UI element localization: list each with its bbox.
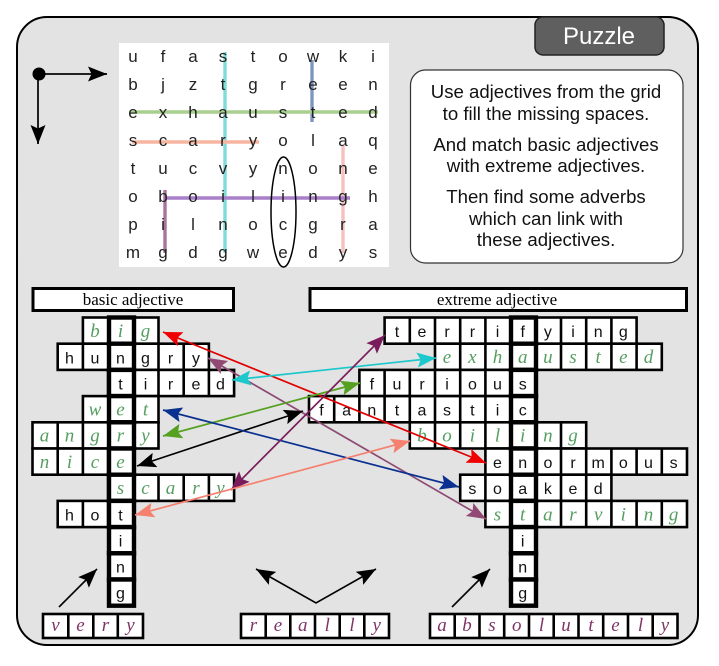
vertical word: interesting: i [118, 321, 123, 342]
vertical word: fascinating: i [521, 534, 524, 550]
vertical word: interesting: t [118, 376, 123, 394]
arrows: really [256, 569, 376, 603]
instructions text box [410, 70, 683, 263]
vertical word: fascinating: n [518, 560, 527, 576]
word: exhausted: exhusted [443, 347, 654, 368]
word: hot: ho [65, 508, 100, 524]
arrow: very [59, 569, 97, 607]
vertical word: fascinating: a [518, 481, 527, 498]
word search grid: mgdgwedys [126, 243, 377, 262]
vertical word: interesting: n [116, 350, 125, 368]
word: scary [108, 475, 234, 501]
icon: direction arrows [32, 68, 107, 144]
instructions text box: Use adjectives from the grid [431, 81, 661, 102]
arrow: nice to fantastic [137, 411, 303, 466]
word: scary: cary [141, 478, 225, 499]
vertical word: interesting: e [116, 400, 125, 420]
arrow: big to enormous [163, 332, 486, 463]
word: angry: angy [40, 426, 150, 446]
adverb: really: really [250, 615, 381, 636]
instructions text box: to fill the missing spaces. [443, 103, 649, 124]
arrow: scary to terrifying [231, 335, 385, 490]
word search grid: ufastowki [128, 47, 375, 66]
word search grid: pilnocgra [128, 215, 378, 234]
vertical word: fascinating [511, 318, 536, 606]
matching arrows [135, 332, 486, 519]
vertical word: fascinating: t [520, 504, 526, 526]
word: boiling: boilng [417, 426, 578, 446]
word: wet: wt [89, 400, 149, 420]
word: big [83, 318, 158, 344]
vertical word: interesting: g [116, 586, 125, 602]
heading: extreme adjective [310, 288, 686, 310]
vertical word: fascinating: g [518, 586, 527, 602]
vertical word: interesting: i [119, 534, 122, 550]
adverb: absolutely: absolutely [437, 615, 670, 636]
vertical word: interesting: t [118, 508, 123, 524]
instructions text box: And match basic adjectives [433, 134, 659, 155]
word: fantastic [309, 396, 511, 422]
heading: basic adjective [33, 288, 234, 310]
word: hungry [58, 344, 209, 370]
instructions text box: these adjectives. [477, 229, 615, 250]
word: angry [32, 422, 158, 448]
word search grid: oboilingh [128, 187, 378, 206]
vertical word: interesting: r [117, 426, 125, 446]
word: furious [359, 370, 511, 396]
vertical word: fascinating: s [519, 376, 527, 394]
vertical word: fascinating: n [518, 455, 527, 472]
word: hungry: hugry [65, 350, 200, 368]
arrow: hot to boiling [135, 441, 410, 515]
word: terrifying: terriying [395, 324, 628, 341]
word: nice: nic [40, 452, 100, 473]
word: hot [58, 501, 108, 527]
basic adjective crossword [32, 318, 234, 606]
heading tab: Puzzle [535, 17, 664, 55]
arrow: tired to exhausted [232, 358, 436, 380]
word: nice [32, 448, 108, 475]
adverb: very: very [51, 615, 135, 636]
vertical word: fascinating: f [520, 324, 525, 341]
heading: extreme adjective: extreme adjective [437, 290, 557, 309]
instructions text box: with extreme adjectives. [446, 155, 645, 176]
instructions text box: which can link with [468, 208, 623, 229]
word: enormous [485, 448, 687, 475]
word: tired [108, 370, 234, 396]
arrow: hungry to starving [208, 358, 486, 519]
extreme adjective crossword [309, 318, 687, 606]
word: fantastic: fantasti [319, 402, 499, 420]
word: soaked: soked [468, 481, 603, 498]
vertical word: interesting: n [116, 560, 125, 576]
arrow: wet to soaked [163, 410, 459, 487]
word: tired: ired [144, 376, 225, 394]
vertical word: fascinating: a [518, 347, 527, 368]
word search grid [119, 43, 389, 267]
vertical word: fascinating: i [520, 426, 525, 446]
heading tab: Puzzle: Puzzle [563, 23, 635, 50]
word search grid: tucvynone [131, 159, 378, 178]
word: starving: sarving [494, 504, 678, 526]
word search grid: exhausted [128, 103, 378, 122]
vertical word: fascinating: c [519, 402, 527, 420]
word: wet [83, 396, 158, 422]
heading: basic adjective: basic adjective [83, 290, 183, 309]
word: soaked [460, 475, 611, 501]
word: enormous: eormous [493, 455, 678, 472]
word: furious: furiou [370, 376, 502, 394]
vertical word: interesting: e [116, 452, 125, 473]
word search grid: scaryolaq [129, 131, 378, 150]
vertical word: interesting [109, 318, 134, 606]
word: terrifying [385, 318, 637, 344]
word search grid: bjztgreen [128, 75, 378, 94]
instructions text box: Then find some adverbs [446, 186, 646, 207]
arrow: angry to furious [163, 383, 360, 436]
arrow: absolutely [452, 569, 490, 607]
vertical word: interesting: s [117, 478, 124, 499]
word: big: bg [90, 321, 150, 342]
